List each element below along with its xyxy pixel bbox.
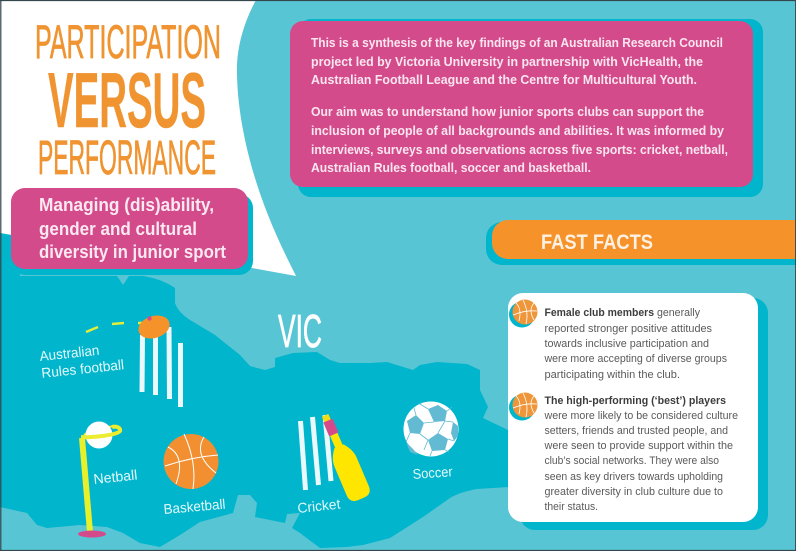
text: female club members: generally bbox=[657, 307, 700, 319]
text: female club members: were more accepting of diverse groups bbox=[544, 353, 727, 365]
text: high-performing players: their status. bbox=[544, 501, 598, 513]
icon: cricket stumps and bat bbox=[300, 410, 372, 504]
text: PERFORMANCE bbox=[38, 132, 216, 185]
text: high-performing players: The high-performing (‘best’) players bbox=[544, 395, 726, 407]
panel: introduction: project led by Victoria University in partnership with VicHealth, the bbox=[311, 55, 703, 69]
panel: introduction: Australian Rules football, soccer and basketball. bbox=[311, 161, 591, 175]
map: Victoria silhouette bbox=[0, 233, 510, 548]
title: PARTICIPATION bbox=[35, 15, 221, 68]
panel: introduction: interviews, surveys and observations across five sports: cricket, netball, bbox=[311, 143, 728, 157]
text: high-performing players: were more likely to be considered culture bbox=[544, 410, 738, 422]
label: Australian Rules football: Rules football bbox=[41, 356, 125, 381]
label: Basketball: Basketball bbox=[163, 496, 226, 517]
label: Cricket: Cricket bbox=[297, 496, 341, 516]
subtitle panel: gender and cultural bbox=[39, 218, 197, 239]
text: high-performing players: greater diversity in club culture due to bbox=[544, 486, 723, 498]
text: high-performing players: seen as key drivers towards upholding bbox=[544, 471, 723, 483]
text: female club members: participating within the club. bbox=[544, 369, 680, 381]
label: Soccer: Soccer bbox=[412, 463, 453, 482]
subtitle panel bbox=[11, 188, 253, 275]
label: Australian Rules football bbox=[39, 339, 125, 381]
text: high-performing players: were seen to provide support within the bbox=[544, 440, 733, 452]
panel: introduction: Australian Football League and the Centre for Multicultural Youth. bbox=[311, 73, 697, 87]
subtitle panel: diversity in junior sport bbox=[39, 241, 226, 262]
speech bubble bbox=[0, 0, 296, 276]
icon: soccer ball bbox=[404, 402, 458, 456]
title: VERSUS bbox=[48, 56, 206, 144]
fast facts banner bbox=[486, 220, 796, 265]
panel: introduction: This is a synthesis of the key findings of an Australian Research Council bbox=[311, 36, 723, 50]
icon: basketball bullet 2 bbox=[509, 392, 538, 420]
title bbox=[35, 15, 221, 185]
panel: introduction: Our aim was to understand how junior sports clubs can support the bbox=[311, 105, 704, 119]
text: female club members: towards inclusive participation and bbox=[544, 338, 709, 350]
label: Australian Rules football: Australian bbox=[39, 342, 100, 364]
text: female club members: reported stronger positive attitudes bbox=[544, 323, 712, 335]
panel: introduction bbox=[290, 19, 763, 197]
text: high-performing players bbox=[544, 395, 738, 513]
label: Netball: Netball bbox=[93, 466, 138, 487]
text: high-performing players: setters, friends and trusted people, and bbox=[544, 425, 728, 437]
VIC label: VIC bbox=[278, 305, 322, 357]
fast facts banner: FAST FACTS bbox=[541, 231, 653, 254]
subtitle panel: Managing (dis)ability, bbox=[39, 194, 214, 215]
icon: basketball bullet 1 bbox=[509, 300, 538, 328]
panel: introduction: inclusion of people of all backgrounds and abilities. It was informed by bbox=[311, 124, 724, 138]
icon: basketball bbox=[164, 434, 218, 489]
icon: Australian Rules goal posts and football bbox=[86, 312, 180, 407]
text: high-performing players: club’s social networks. They were also bbox=[544, 455, 719, 467]
text: female club members bbox=[544, 307, 727, 381]
icon: netball hoop bbox=[78, 422, 120, 538]
text: female club members: Female club members bbox=[544, 307, 654, 319]
panel: fast facts bbox=[508, 293, 768, 530]
